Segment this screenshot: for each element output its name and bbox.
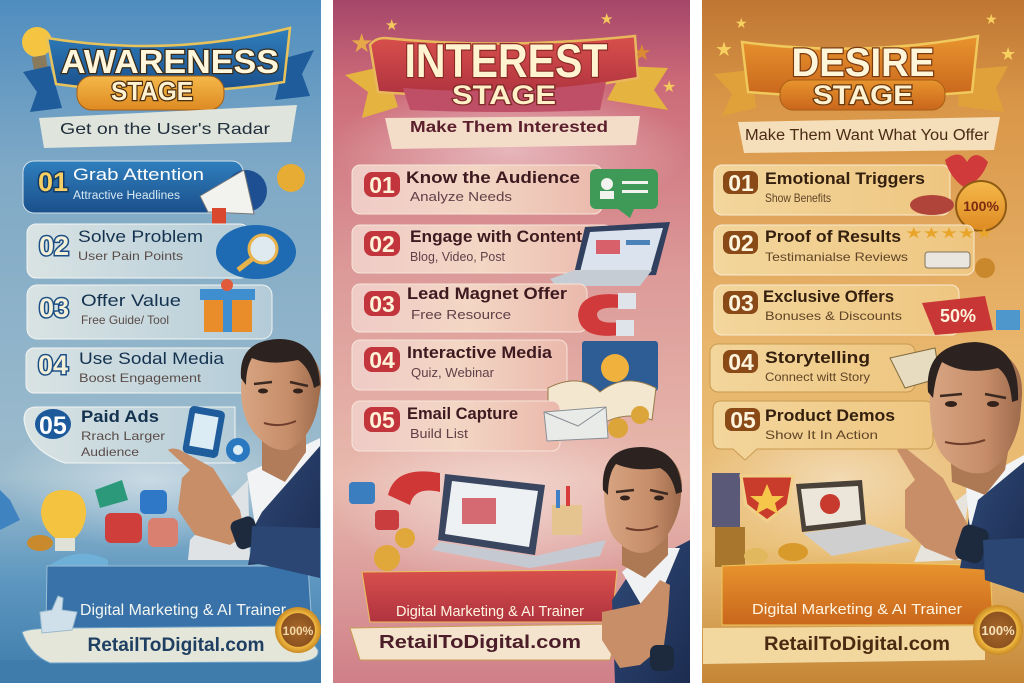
icon: film roll bbox=[890, 348, 940, 388]
row 03 bbox=[714, 285, 959, 335]
panel: awareness stage bbox=[0, 0, 321, 683]
row 03 bbox=[352, 284, 587, 332]
row 01: 01 bbox=[38, 167, 68, 197]
sparkle stars: ★ bbox=[715, 39, 733, 61]
row 05: Rrach Larger bbox=[81, 429, 165, 443]
badge: 100% bbox=[283, 624, 314, 638]
stage pill: STAGE bbox=[813, 80, 913, 110]
row 02: User Pain Points bbox=[78, 249, 183, 263]
row 01: Know the Audience bbox=[406, 169, 580, 187]
icon: envelope bbox=[544, 406, 649, 441]
row 01: Show Benefits bbox=[765, 191, 831, 205]
row 01: 01 bbox=[728, 170, 754, 196]
sparkle stars: ★ bbox=[735, 15, 748, 31]
footer banner: Digital Marketing & AI Trainer bbox=[396, 603, 584, 620]
row 04: Storytelling bbox=[765, 349, 870, 367]
row 03: Exclusive Offers bbox=[763, 288, 894, 306]
row 03: Lead Magnet Offer bbox=[407, 285, 568, 303]
stage pill bbox=[403, 80, 606, 112]
row 03 bbox=[27, 285, 272, 339]
row 04: Use Sodal Media bbox=[79, 350, 225, 368]
stage pill: STAGE bbox=[111, 76, 193, 106]
row 02: 02 bbox=[369, 231, 395, 257]
banner: desire: DESIRE bbox=[792, 41, 934, 85]
row 03: Free Resource bbox=[411, 307, 511, 322]
icon: discount tag: 50% bbox=[940, 306, 976, 326]
row 01 bbox=[714, 165, 950, 215]
row 01 bbox=[23, 161, 243, 213]
row 02: Solve Problem bbox=[78, 228, 203, 246]
row 03: Bonuses & Discounts bbox=[765, 309, 902, 323]
subtitle bbox=[39, 105, 297, 148]
sparkle stars: ★ bbox=[600, 11, 613, 28]
icon: gift bbox=[200, 279, 255, 332]
footer banner: RetailToDigital.com bbox=[764, 634, 950, 655]
row 05 bbox=[352, 401, 560, 451]
row 03: 03 bbox=[728, 290, 754, 316]
row 04 bbox=[710, 344, 915, 392]
sparkle stars: ★ bbox=[1000, 44, 1016, 64]
row 01: Analyze Needs bbox=[410, 189, 513, 204]
icon: stars: ★★★★★ bbox=[905, 225, 993, 242]
row 05 bbox=[24, 407, 235, 463]
banner: desire bbox=[714, 36, 1008, 116]
subtitle bbox=[385, 116, 640, 149]
row 02: Engage with Content bbox=[410, 228, 583, 246]
icon: book and screen bbox=[548, 341, 658, 425]
subtitle: Make Them Interested bbox=[410, 119, 608, 136]
sparkle stars: ★ bbox=[662, 79, 676, 96]
row 04: Interactive Media bbox=[407, 344, 553, 362]
row 02 bbox=[714, 225, 974, 275]
icon: laptop bbox=[550, 222, 670, 286]
footer banner bbox=[22, 566, 318, 663]
person bbox=[602, 447, 690, 683]
subtitle bbox=[738, 117, 1000, 153]
person bbox=[897, 342, 1024, 593]
icon: profile chat bbox=[590, 169, 658, 218]
sparkle stars: ★ bbox=[350, 28, 373, 58]
row 02: 02 bbox=[728, 230, 754, 256]
panel: desire stage bbox=[690, 0, 1024, 683]
banner: awareness: AWARENESS bbox=[61, 43, 279, 80]
row 02: 02 bbox=[39, 231, 69, 261]
badge bbox=[973, 605, 1023, 655]
sparkle stars: ★ bbox=[985, 11, 998, 27]
row 04 bbox=[26, 348, 258, 393]
row 03: 03 bbox=[39, 293, 69, 323]
illustration: laptop and magnet bbox=[349, 471, 606, 571]
row 01: Attractive Headlines bbox=[73, 190, 180, 202]
row 05: Audience bbox=[81, 445, 139, 459]
row 05: Show It In Action bbox=[765, 428, 878, 442]
row 05: 05 bbox=[39, 412, 67, 440]
row 01 bbox=[352, 165, 602, 214]
row 03: Offer Value bbox=[81, 292, 181, 310]
row 05: Product Demos bbox=[765, 407, 895, 425]
panel: interest stage bbox=[330, 0, 690, 683]
row 04: 04 bbox=[38, 350, 68, 380]
row 02: Testimanialse Reviews bbox=[765, 250, 908, 264]
stage pill: STAGE bbox=[452, 80, 556, 110]
row 04 bbox=[352, 340, 567, 390]
footer banner: Digital Marketing & AI Trainer bbox=[80, 602, 287, 619]
row 02 bbox=[352, 225, 612, 273]
banner: interest: INTEREST bbox=[404, 34, 608, 87]
icon: phone bbox=[182, 405, 250, 462]
row 01: Emotional Triggers bbox=[765, 170, 925, 188]
row 05: Email Capture bbox=[407, 405, 518, 423]
sparkle stars bbox=[350, 11, 676, 96]
icon: light bulb top bbox=[22, 27, 52, 73]
subtitle: Make Them Want What You Offer bbox=[745, 127, 989, 144]
illustration: shield and laptop bbox=[712, 473, 913, 567]
icon: thumb bbox=[40, 596, 77, 633]
row 02: Proof of Results bbox=[765, 228, 901, 246]
row 03: Free Guide/ Tool bbox=[81, 313, 169, 327]
person bbox=[168, 339, 321, 578]
icons: bulb and social bbox=[0, 480, 178, 568]
row 05: Build List bbox=[410, 426, 468, 441]
row 03: 03 bbox=[369, 291, 395, 317]
icon: magnet bbox=[578, 293, 636, 336]
icon: stars bbox=[905, 225, 995, 278]
icon: discount tag bbox=[922, 296, 1020, 335]
footer banner bbox=[703, 563, 993, 664]
banner: awareness bbox=[23, 28, 314, 112]
icon: 100 badge and heart: 100% bbox=[963, 198, 999, 214]
sparkle stars bbox=[715, 11, 1016, 64]
row 01: 01 bbox=[369, 172, 395, 198]
row 04: Quiz, Webinar bbox=[411, 365, 495, 380]
row 02 bbox=[27, 224, 249, 278]
badge bbox=[275, 607, 321, 653]
subtitle: Get on the User's Radar bbox=[60, 121, 271, 138]
row 05: Paid Ads bbox=[81, 408, 159, 426]
row 05: 05 bbox=[369, 407, 395, 433]
sparkle stars: ★ bbox=[385, 17, 398, 34]
footer banner: Digital Marketing & AI Trainer bbox=[752, 601, 962, 618]
stage pill bbox=[780, 80, 945, 110]
row 04: 04 bbox=[369, 347, 395, 373]
row 05 bbox=[713, 401, 933, 460]
row 04: Boost Engagement bbox=[79, 371, 202, 385]
footer banner bbox=[350, 570, 620, 660]
row 02: Blog, Video, Post bbox=[410, 249, 505, 264]
badge: 100% bbox=[981, 623, 1015, 638]
row 01: Grab Attention bbox=[73, 166, 204, 184]
icon: megaphone bbox=[200, 164, 305, 228]
stage pill bbox=[77, 76, 224, 110]
icon: magnifier bbox=[216, 225, 296, 279]
icon: 100 badge and heart bbox=[910, 154, 1006, 231]
row 05: 05 bbox=[730, 407, 756, 433]
footer banner: RetailToDigital.com bbox=[88, 635, 264, 656]
row 04: Connect witt Story bbox=[765, 370, 870, 384]
row 04: 04 bbox=[728, 349, 754, 375]
sparkle stars: ★ bbox=[632, 40, 652, 65]
banner: interest bbox=[345, 34, 668, 118]
footer banner: RetailToDigital.com bbox=[379, 632, 581, 652]
